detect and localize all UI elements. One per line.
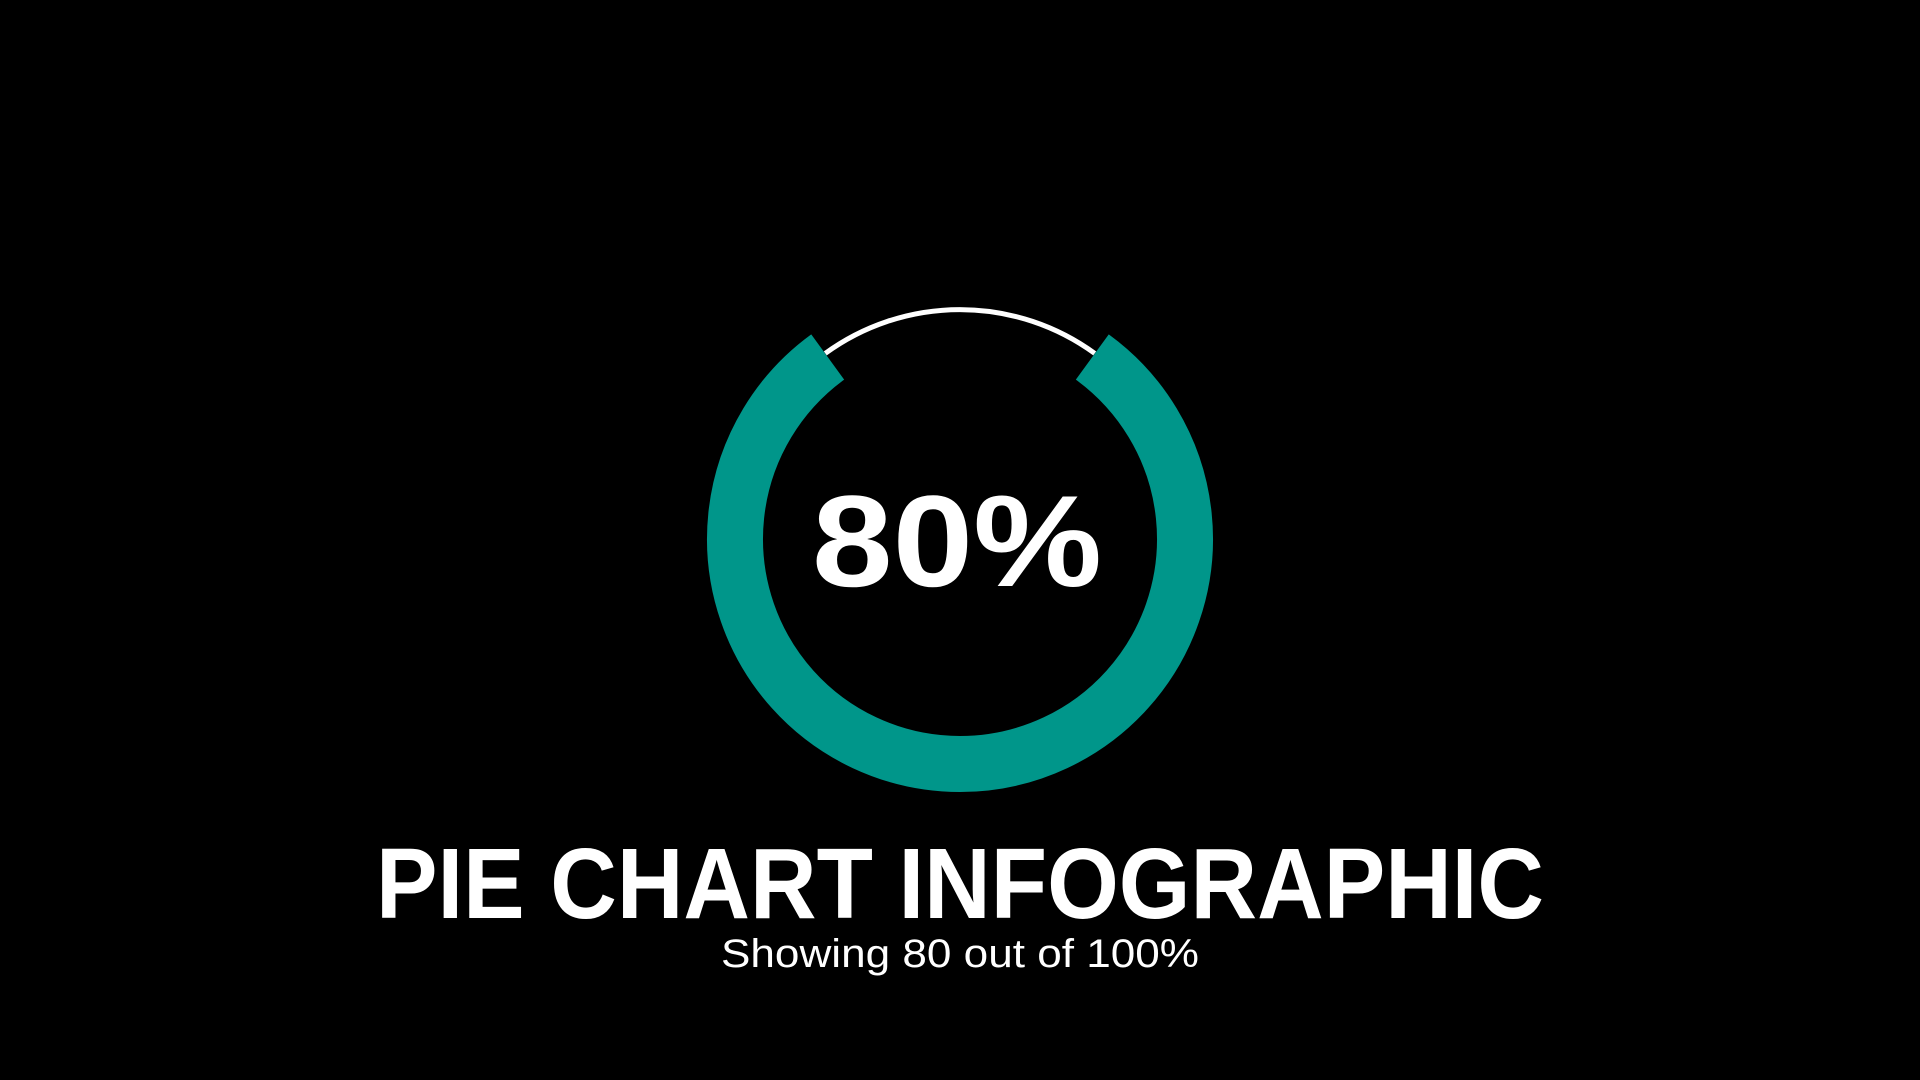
title: PIE CHART INFOGRAPHIC	[376, 828, 1544, 940]
remaining portion arc (white)	[825, 310, 1095, 353]
filled portion arc (80%, teal)	[735, 357, 1185, 764]
percentage label: 80%	[812, 468, 1102, 614]
pie chart ring	[735, 310, 1185, 764]
subtitle: Showing 80 out of 100%	[721, 932, 1199, 976]
